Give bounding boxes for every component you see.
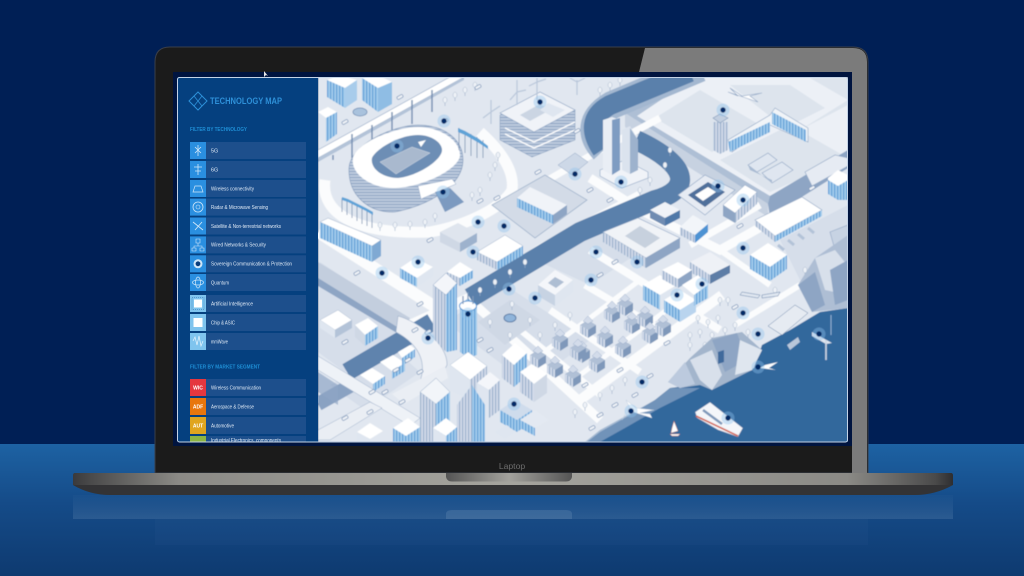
laptop lid <box>155 47 868 473</box>
row: chip and ASIC: Chip & ASIC <box>211 320 235 326</box>
row: mmWave <box>190 333 306 350</box>
laptop label: Laptop <box>499 461 525 471</box>
background wall <box>0 0 1024 445</box>
canal <box>318 68 700 404</box>
row: wireless communication: Wireless Communication <box>211 386 261 392</box>
row: industrial electronics <box>190 436 306 444</box>
row: wireless connectivity: Wireless connectivity <box>211 186 254 192</box>
row: wireless connectivity <box>190 180 306 197</box>
convention hall <box>603 218 680 268</box>
central rock outcrop <box>668 332 762 390</box>
vehicles <box>341 84 816 431</box>
row: aerospace and defense: Aerospace & Defense <box>211 404 254 410</box>
airplane at airport <box>728 88 762 102</box>
row: aerospace and defense <box>190 398 306 415</box>
ground patches <box>318 205 848 410</box>
map illustration <box>318 68 848 442</box>
row: automotive <box>190 417 306 434</box>
row: aerospace and defense: ADF <box>193 404 203 410</box>
row: radar <box>190 199 306 216</box>
overpass <box>318 262 448 440</box>
right mountain <box>798 235 848 312</box>
row: chip and ASIC <box>190 314 306 331</box>
airport plateau <box>625 77 848 217</box>
location markers <box>376 96 826 424</box>
wind turbines <box>483 78 585 124</box>
row: quantum <box>190 274 306 291</box>
row: sovereign communication <box>190 255 306 272</box>
title: TECHNOLOGY MAP <box>210 95 282 106</box>
row: wireless communication: WIC <box>193 386 203 392</box>
laptop base <box>73 473 953 495</box>
central plaza complex <box>492 153 588 238</box>
low blocks beside highway <box>320 310 549 439</box>
warehouse <box>755 197 848 252</box>
airport control tower and terminal <box>713 108 808 154</box>
row: automotive: AUT <box>193 424 203 430</box>
row: 6G <box>190 161 306 178</box>
row: quantum: Quantum <box>211 280 229 286</box>
trees <box>378 77 807 418</box>
top-left buildings <box>318 75 392 142</box>
row: satellite: Satellite & Non-terrestrial networks <box>211 224 281 230</box>
row: wireless communication <box>190 379 306 396</box>
row: sovereign communication: Sovereign Communication & Protection <box>211 262 292 268</box>
row: radar: Radar & Microwave Sensing <box>211 205 268 211</box>
sailboat <box>670 421 680 436</box>
row: mmWave: mmWave <box>211 340 228 346</box>
hangars <box>748 153 793 183</box>
row: industrial electronics: Industrial Electronics, components <box>211 438 281 444</box>
cruise ship <box>695 402 743 437</box>
row: 6G: 6G <box>211 168 218 174</box>
row: 5G: 5G <box>211 148 218 154</box>
elevated rail <box>318 77 464 162</box>
stadium <box>349 125 464 212</box>
row: 5G <box>190 142 306 159</box>
heading: filter by market segment: FILTER BY MARKET SEGMENT <box>190 364 260 370</box>
blue apartment cluster <box>643 243 787 322</box>
row: automotive: Automotive <box>211 424 234 430</box>
table surface <box>0 444 1024 576</box>
laptop reflection <box>73 495 953 545</box>
right-edge terminal buildings <box>805 155 848 200</box>
buildings near centre <box>400 223 573 306</box>
sea shore <box>585 388 700 442</box>
row: artificial intelligence: Artificial Intelligence <box>211 302 253 308</box>
satellite dish panels <box>740 292 808 335</box>
twin towers by canal <box>600 117 648 188</box>
row: wired networks: Wired Networks & Security <box>211 242 266 248</box>
parking garage <box>500 92 575 157</box>
downtown skyscrapers <box>357 273 547 442</box>
small boats and wind turbine at sea <box>760 315 832 370</box>
flags <box>342 128 488 228</box>
logo <box>189 92 207 110</box>
white roads <box>318 118 800 420</box>
sea <box>587 308 848 442</box>
sidebar panel <box>177 77 318 444</box>
lower-left apartment block <box>320 218 381 262</box>
row: satellite <box>190 218 306 234</box>
screen outline <box>178 78 848 442</box>
mouse cursor <box>264 71 268 77</box>
heading: filter by technology: FILTER BY TECHNOLOGY <box>190 127 247 133</box>
row: artificial intelligence <box>190 295 306 312</box>
plaza fountain <box>483 301 533 342</box>
row: wired networks <box>190 236 306 253</box>
seaplane <box>622 400 654 420</box>
residential houses <box>530 294 671 387</box>
mid complex buildings <box>650 175 757 243</box>
